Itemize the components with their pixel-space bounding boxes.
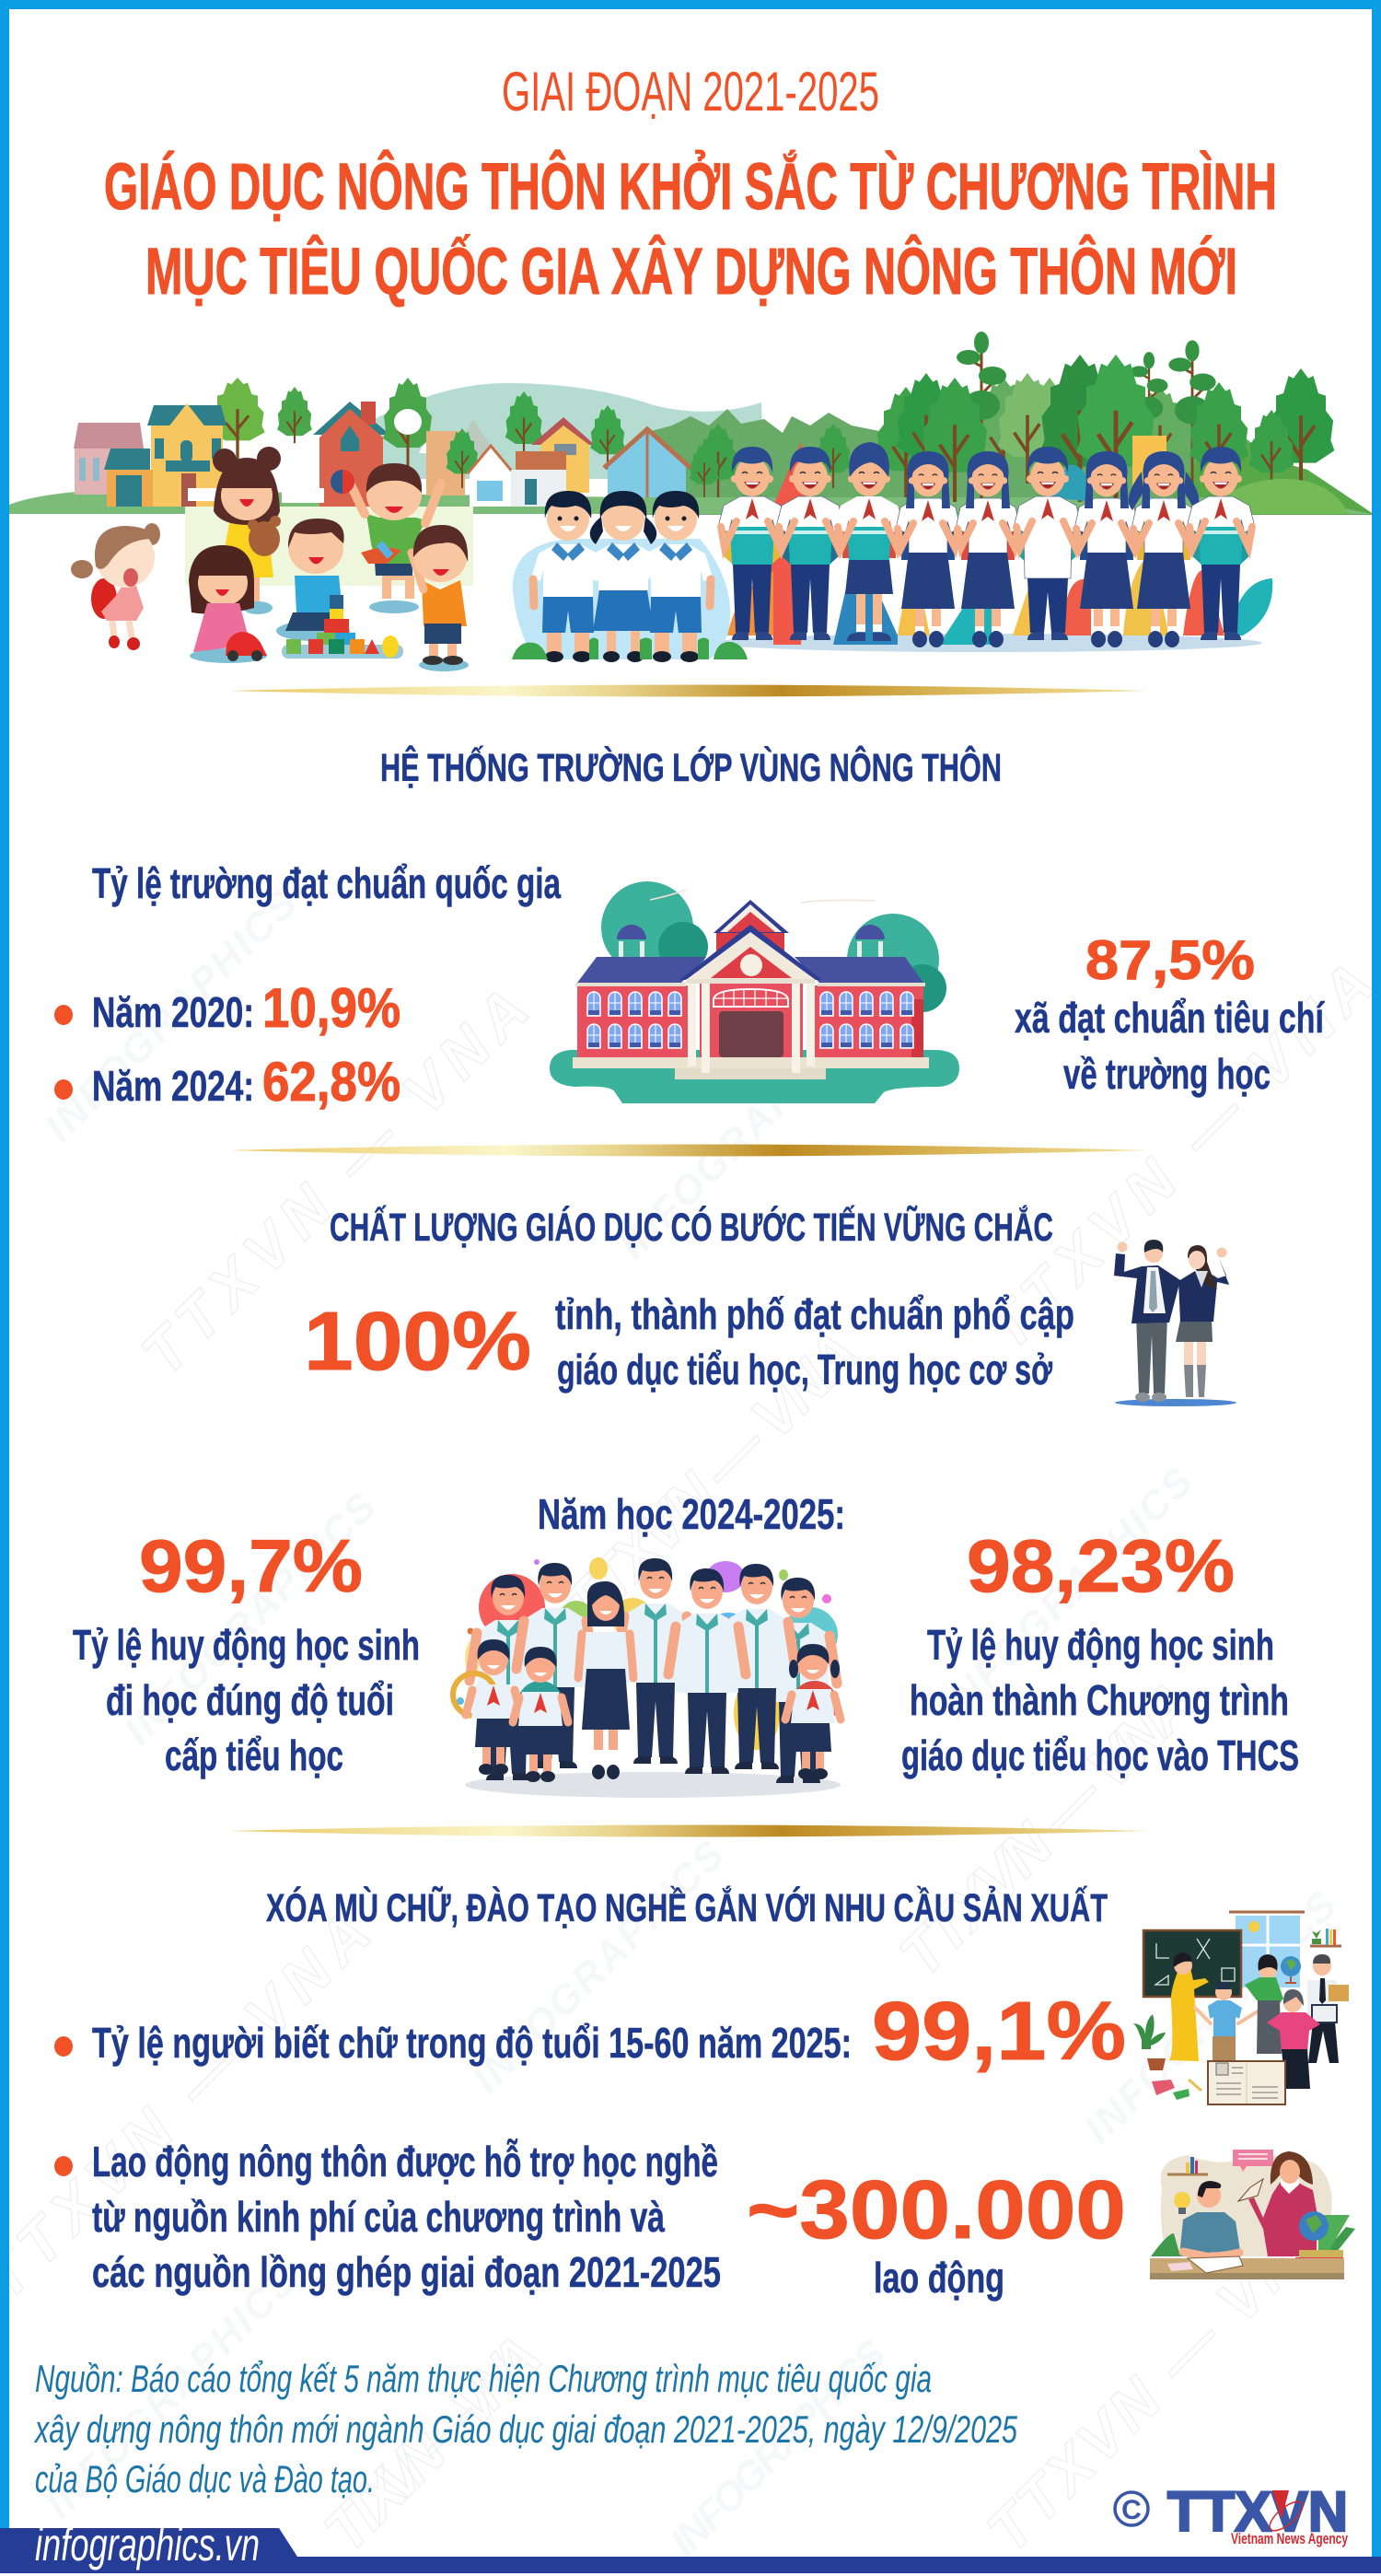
watermark: TTXVN — VNA [129, 975, 541, 1388]
pale fenced yard [185, 507, 473, 586]
stat: 100 percent provinces: 100% [304, 1296, 531, 1388]
watermark: INFOGRAPHICS [932, 1459, 1201, 1729]
stat: primary completion to lower secondary [901, 1525, 1299, 1779]
logo: TTXVN: C [1121, 2495, 1142, 2525]
child: boy in orange shirt [412, 525, 469, 671]
watermark: TTXVN — VNA [974, 2191, 1347, 2565]
watermark: INFOGRAPHICS [661, 2331, 895, 2565]
source note [34, 2357, 1017, 2500]
gold divider [230, 1825, 1149, 1836]
school standard rates: Tỷ lệ trường đạt chuẩn quốc gia [92, 859, 561, 907]
stat: literacy rate [54, 1986, 1126, 2078]
title [104, 150, 1277, 309]
stat: rural workers supported [54, 2138, 1126, 2302]
ground strip [9, 490, 1372, 514]
stat: rural workers supported: các nguồn lồng ghép giai đoạn 2021-2025 [92, 2248, 721, 2296]
stat: communes meeting school criteria [1015, 929, 1326, 1098]
stat: 100 percent provinces: giáo dục tiểu học, Trung học cơ sở [557, 1346, 1052, 1393]
background hill [350, 383, 764, 479]
icon: two students in uniform [1114, 1240, 1236, 1406]
child: laughing girl [71, 523, 160, 650]
trio of primary pupils with blue blob [512, 491, 748, 662]
stat: literacy rate: 99,1% [872, 1986, 1126, 2078]
watermark: TTXVN — VNA [551, 1318, 872, 1639]
stat: literacy rate: Tỷ lệ người biết chữ trong độ tuổi 15-60 năm 2025: [92, 2019, 852, 2067]
stat: communes meeting school criteria: 87,5% [1085, 929, 1255, 991]
stat: on-time primary enrolment: cấp tiểu học [165, 1731, 343, 1779]
footer bar [0, 2519, 1381, 2573]
watermark: TTXVN — VNA [974, 950, 1381, 1362]
school standard rates: Năm 2020: [92, 988, 254, 1036]
illustration: teacher and student at desk [1150, 2150, 1355, 2279]
source note: xây dựng nông thôn mới ngành Giáo dục giai đoạn 2021-2025, ngày 12/9/2025 [34, 2407, 1017, 2451]
heading: education quality: CHẤT LƯỢNG GIÁO DỤC CÓ BƯỚC TIẾN VỮNG CHẮC [330, 1205, 1053, 1250]
subtitle: GIAI ĐOẠN 2021-2025 [502, 61, 879, 122]
icon: school building [550, 881, 959, 1103]
watermark: INFOGRAPHICS [609, 998, 879, 1268]
stat: on-time primary enrolment: Tỷ lệ huy động học sinh [73, 1621, 420, 1669]
child: boy in green shirt with ball [331, 463, 441, 613]
gold divider [230, 1144, 1149, 1157]
stat: on-time primary enrolment [73, 1525, 420, 1779]
school standard rates: 62,8% [262, 1051, 400, 1113]
school standard rates [54, 859, 561, 1113]
watermark: TTXVN — VNA [887, 1668, 1208, 1989]
footer site label: infographics.vn [35, 2519, 260, 2570]
child: girl with toy car [189, 545, 267, 663]
school standard rates: Năm 2024: [92, 1062, 254, 1110]
watermark: INFOGRAPHICS [36, 2257, 306, 2527]
houses [74, 378, 690, 507]
watermark: INFOGRAPHICS [1075, 1882, 1345, 2152]
source note: của Bộ Giáo dục và Đào tạo. [35, 2457, 375, 2500]
stat: rural workers supported: Lao động nông thôn được hỗ trợ học nghề [92, 2138, 718, 2186]
watermark: TTXVN — VNA [311, 2321, 554, 2565]
stat: rural workers supported: lao động [874, 2254, 1004, 2302]
child: boy with blocks [276, 519, 350, 641]
stat: 100 percent provinces [304, 1290, 1074, 1393]
logo: TTXVN: TTXVN [1167, 2480, 1348, 2543]
stat: 100 percent provinces: tỉnh, thành phố đạt chuẩn phổ cập [555, 1290, 1074, 1338]
watermark: INFOGRAPHICS [115, 1484, 385, 1754]
watermark: INFOGRAPHICS [36, 880, 306, 1150]
stat: on-time primary enrolment: 99,7% [139, 1525, 363, 1608]
stat: communes meeting school criteria: về trường học [1063, 1050, 1271, 1098]
illustration: village, forest and children [9, 332, 1372, 671]
stat: rural workers supported: từ nguồn kinh phí của chương trình và [92, 2193, 665, 2241]
forest backdrop [635, 382, 1372, 515]
colourful background shapes behind students [714, 436, 1272, 652]
illustration: group of students [453, 1557, 841, 1798]
toy blocks [282, 595, 403, 659]
child: girl with teddy bear [213, 447, 281, 614]
forest trees [690, 332, 1349, 514]
watermark [0, 880, 1381, 2565]
heading: school system: HỆ THỐNG TRƯỜNG LỚP VÙNG NÔNG THÔN [380, 745, 1002, 790]
gold divider [230, 685, 1149, 696]
stat: rural workers supported: ~300.000 [747, 2164, 1126, 2256]
source note: Nguồn: Báo cáo tổng kết 5 năm thực hiện Chương trình mục tiêu quốc gia [35, 2357, 932, 2400]
watermark: INFOGRAPHICS [463, 1832, 733, 2102]
label: school year: Năm học 2024-2025: [538, 1490, 845, 1538]
stat: primary completion to lower secondary: 98,23% [967, 1525, 1235, 1608]
line of nine secondary pupils [718, 442, 1255, 647]
school standard rates: 10,9% [262, 977, 400, 1039]
stat: on-time primary enrolment: đi học đúng độ tuổi [106, 1676, 394, 1724]
illustration: teachers at blackboard [1132, 1912, 1349, 2104]
